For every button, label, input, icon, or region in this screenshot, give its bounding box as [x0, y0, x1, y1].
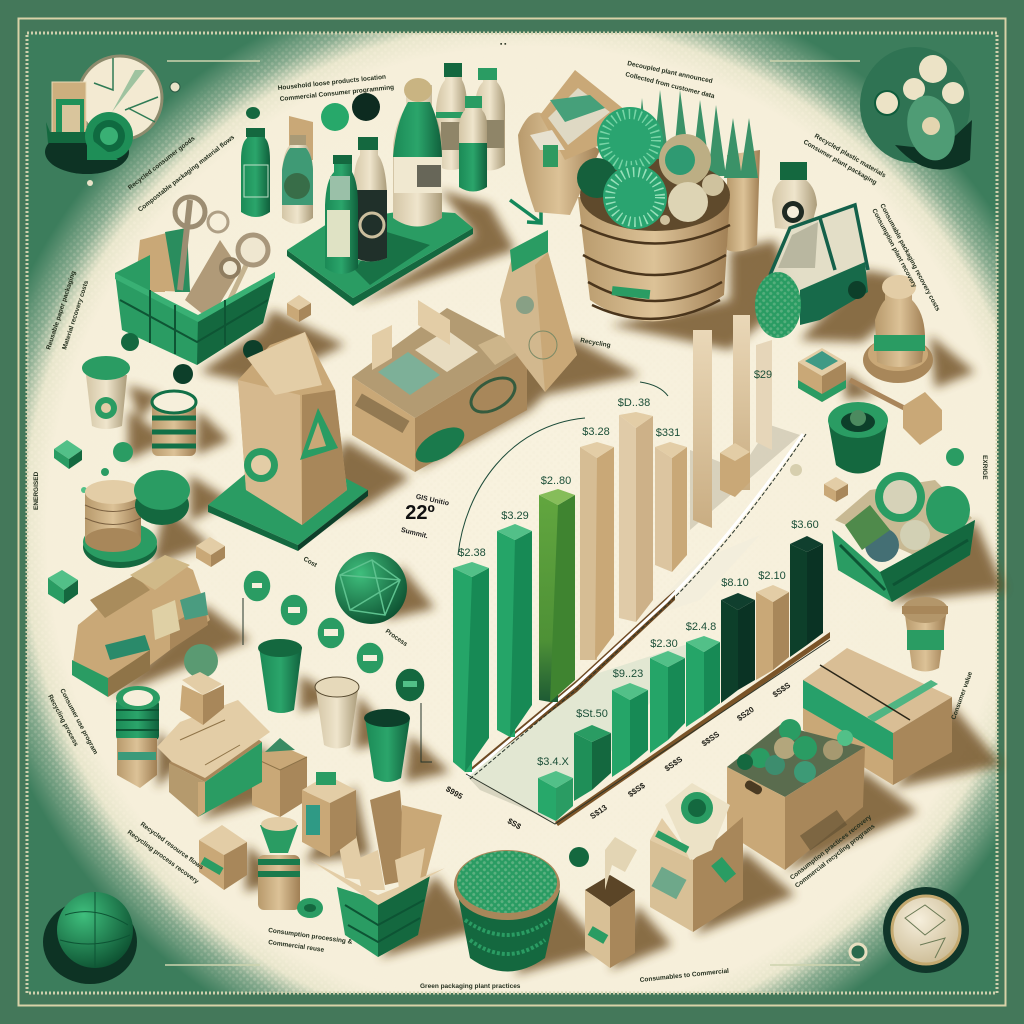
- stacked pot figure: [258, 817, 323, 918]
- bottle B: [282, 116, 313, 224]
- captions: Collected from customer data: [625, 71, 716, 100]
- box of green produce: [727, 719, 865, 870]
- totem: [180, 644, 224, 725]
- icon: clock with roll: [45, 56, 180, 186]
- value labels: $331: [656, 427, 680, 439]
- standing bag: [500, 230, 577, 392]
- callout: 22: 22º: [405, 502, 435, 524]
- value labels: $St.50: [576, 708, 608, 720]
- captions: Consumables to Commercial: [639, 968, 729, 984]
- value labels: [458, 369, 819, 768]
- captions: Recycled plastic materials: [813, 133, 887, 180]
- axis labels: $$SS: [700, 729, 722, 748]
- dot and cube: [790, 448, 964, 502]
- bottle C: [325, 155, 358, 274]
- captions: Consumption processing &: [268, 927, 353, 946]
- bottle F: [436, 63, 467, 170]
- icon: green globe: [43, 892, 137, 984]
- captions: ENERGISED: [33, 471, 40, 510]
- callout: 22: GIS Unitio: [415, 494, 450, 507]
- hex carton: [252, 738, 307, 817]
- small green cube: [48, 570, 78, 604]
- callout: 22: [400, 494, 450, 540]
- value labels: $2.10: [758, 570, 786, 582]
- disc stack: [83, 470, 190, 568]
- cast shadows: [110, 190, 1005, 975]
- basket of kraft tags: [310, 790, 445, 957]
- captions: Commercial reuse: [268, 939, 325, 954]
- value labels: $9..23: [613, 668, 643, 680]
- kraft recycling bag: [208, 332, 368, 551]
- green cup two: [364, 709, 410, 782]
- captions: Recycled consumer goods: [127, 135, 197, 192]
- platform: [287, 210, 473, 306]
- ring stack: [116, 686, 160, 788]
- callout: 22: Summit.: [400, 527, 429, 540]
- kraft cup: [315, 677, 359, 748]
- chart floor: [458, 382, 830, 826]
- green arrow: [510, 200, 541, 223]
- open cardboard box: [352, 300, 527, 472]
- captions: Recycling process: [46, 694, 80, 748]
- bottle H: [459, 96, 487, 192]
- captions: Consumption plant recovery: [870, 208, 918, 289]
- axis labels: $S$S: [663, 754, 685, 773]
- green bead basket: [454, 850, 560, 972]
- coffee cup: [82, 356, 130, 429]
- cactus barrel: [577, 90, 760, 321]
- value labels: $2..80: [541, 475, 571, 487]
- bottle G: [475, 68, 505, 170]
- value labels: $3.60: [791, 519, 819, 531]
- badge path: [243, 570, 432, 762]
- icon: paw badge: [860, 47, 972, 170]
- axis labels: $$S$: [626, 781, 647, 799]
- value labels: $2.30: [650, 638, 678, 650]
- captions: Compostable packaging material flows: [137, 134, 236, 214]
- wire globe: [335, 552, 407, 624]
- captions: Recycling process recovery: [126, 829, 200, 886]
- bottle D: [353, 137, 387, 262]
- captions: EXRIGE: [981, 455, 988, 480]
- bottles on green platform: [241, 63, 505, 306]
- axis labels: $S$S: [771, 680, 793, 699]
- green cup one: [258, 639, 302, 713]
- value labels: $3.28: [582, 426, 610, 438]
- open parcel: [157, 700, 270, 817]
- 3D bar chart: [444, 315, 830, 832]
- captions: Process: [384, 628, 409, 648]
- kraft bottle right: [772, 162, 817, 232]
- axis labels: $S$: [506, 816, 523, 832]
- captions: Consumer value: [950, 670, 974, 721]
- cube and dots: [54, 440, 133, 493]
- value labels: $3.29: [501, 510, 529, 522]
- ceramic vase: [863, 275, 933, 383]
- value labels: $3.4.X: [537, 756, 570, 768]
- value labels: $2.4.8: [686, 621, 716, 633]
- captions: ▪ ▪: [500, 41, 506, 48]
- small box with scoop: [798, 348, 942, 445]
- captions: Recycling: [580, 337, 611, 349]
- small carton: [569, 837, 637, 968]
- small parcel: [302, 772, 356, 857]
- bottle A: [241, 107, 270, 217]
- axis labels: $995: [444, 784, 465, 801]
- large parcel: [803, 648, 952, 785]
- captions: Consumable packaging recovery costs: [878, 203, 941, 313]
- back bars: [453, 562, 489, 772]
- value labels: $8.10: [721, 577, 749, 589]
- small box: [199, 825, 247, 890]
- produce crate: [832, 472, 975, 602]
- captions: Material recovery costs: [61, 279, 90, 351]
- kraft basket: [518, 70, 625, 215]
- captions: Reusable paper packaging: [45, 270, 77, 351]
- icon: map globe: [850, 887, 969, 973]
- value labels: $D..38: [618, 397, 650, 409]
- milk carton: [650, 783, 743, 932]
- knit basket: [828, 402, 888, 474]
- captions: Commercial recycling programs: [794, 823, 877, 890]
- small cubes: [287, 295, 311, 322]
- basket of tools: [115, 197, 275, 384]
- captions: Consumer use program: [58, 688, 99, 756]
- value labels: $2.38: [458, 547, 486, 559]
- green cart: [755, 205, 868, 338]
- captions: Consumer plant packaging: [802, 139, 878, 186]
- captions: Consumption practices recovery: [789, 814, 873, 882]
- axis labels: [444, 680, 793, 832]
- captions: Cost: [302, 556, 319, 569]
- captions: Decoupled plant announced: [627, 60, 713, 85]
- captions: Commercial Consumer programming: [279, 84, 394, 103]
- value labels: $29: [754, 369, 772, 381]
- captions: Household loose products location: [277, 74, 386, 92]
- captions: Recycled resource flows: [139, 821, 205, 872]
- bottle E: [393, 78, 442, 226]
- front bars: [538, 771, 573, 821]
- tape roll stack: [152, 391, 196, 456]
- takeaway cup: [902, 597, 948, 672]
- far bars: [693, 315, 772, 528]
- axis labels: S$13: [588, 803, 609, 821]
- pile of boxes: [72, 555, 210, 697]
- axis labels: $S20: [735, 705, 756, 723]
- captions: Green packaging plant practices: [420, 983, 521, 990]
